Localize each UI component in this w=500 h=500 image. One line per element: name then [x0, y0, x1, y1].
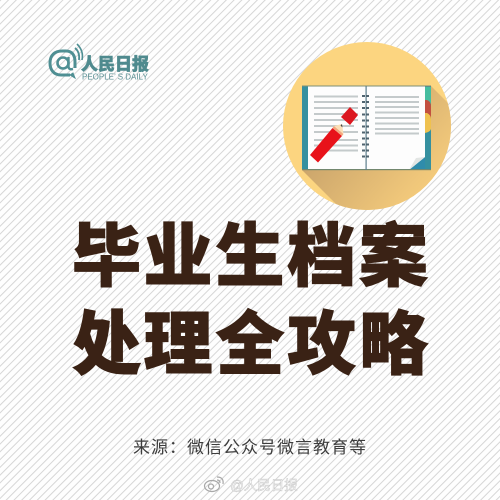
title: [72, 218, 428, 383]
logo subtitle: PEOPLE’ S DAILY: [82, 72, 148, 82]
title line 2: 处理全攻略: [72, 306, 428, 383]
title line 1: 毕业生档案: [72, 218, 428, 295]
notebook cover: [302, 86, 431, 170]
long shadow: [302, 86, 451, 210]
icon: weibo: [204, 477, 223, 492]
icon: notebook in circle: [283, 42, 451, 210]
watermark: [204, 477, 298, 493]
source text: 来源：微信公众号微言教育等: [133, 438, 367, 457]
pencil: [310, 107, 358, 162]
index tabs: [425, 87, 431, 133]
logo: People's Daily: [50, 44, 149, 82]
notebook pages: [302, 86, 431, 170]
watermark name: @人民日报: [230, 478, 298, 493]
spiral binding: [362, 96, 370, 156]
icon: at sign with signal waves: [50, 44, 82, 78]
logo name: 人民日报: [81, 55, 149, 74]
yellow circle: [283, 42, 451, 210]
text lines: right page: [375, 96, 419, 134]
text lines: left page: [314, 96, 358, 152]
